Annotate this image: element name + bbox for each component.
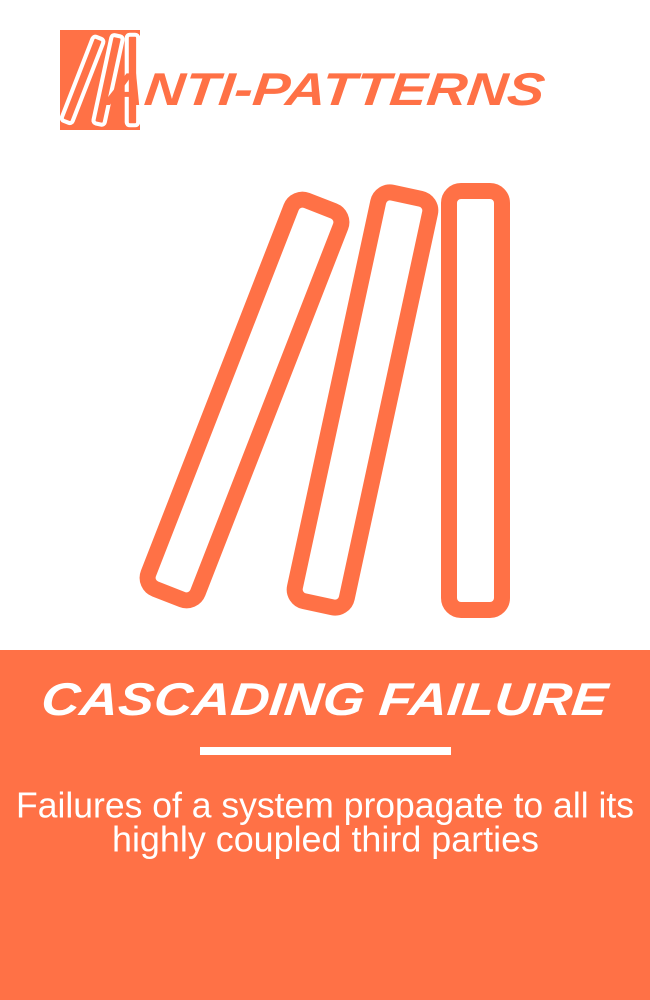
bar: upright bbox=[449, 191, 502, 610]
description text: Failures of a system propagate to all its bbox=[16, 784, 634, 826]
illustration: three leaning bars bbox=[144, 190, 502, 610]
bar: most tilted bbox=[144, 196, 345, 604]
heading: CASCADING FAILURE bbox=[39, 673, 612, 725]
title: ANTI-PATTERNS bbox=[101, 63, 548, 115]
description text bbox=[16, 784, 634, 860]
logo icon bbox=[60, 30, 140, 130]
panel: description bbox=[0, 650, 650, 1000]
bar: slightly tilted bbox=[292, 190, 433, 610]
divider bar bbox=[200, 747, 451, 755]
description text: highly coupled third parties bbox=[112, 818, 539, 860]
